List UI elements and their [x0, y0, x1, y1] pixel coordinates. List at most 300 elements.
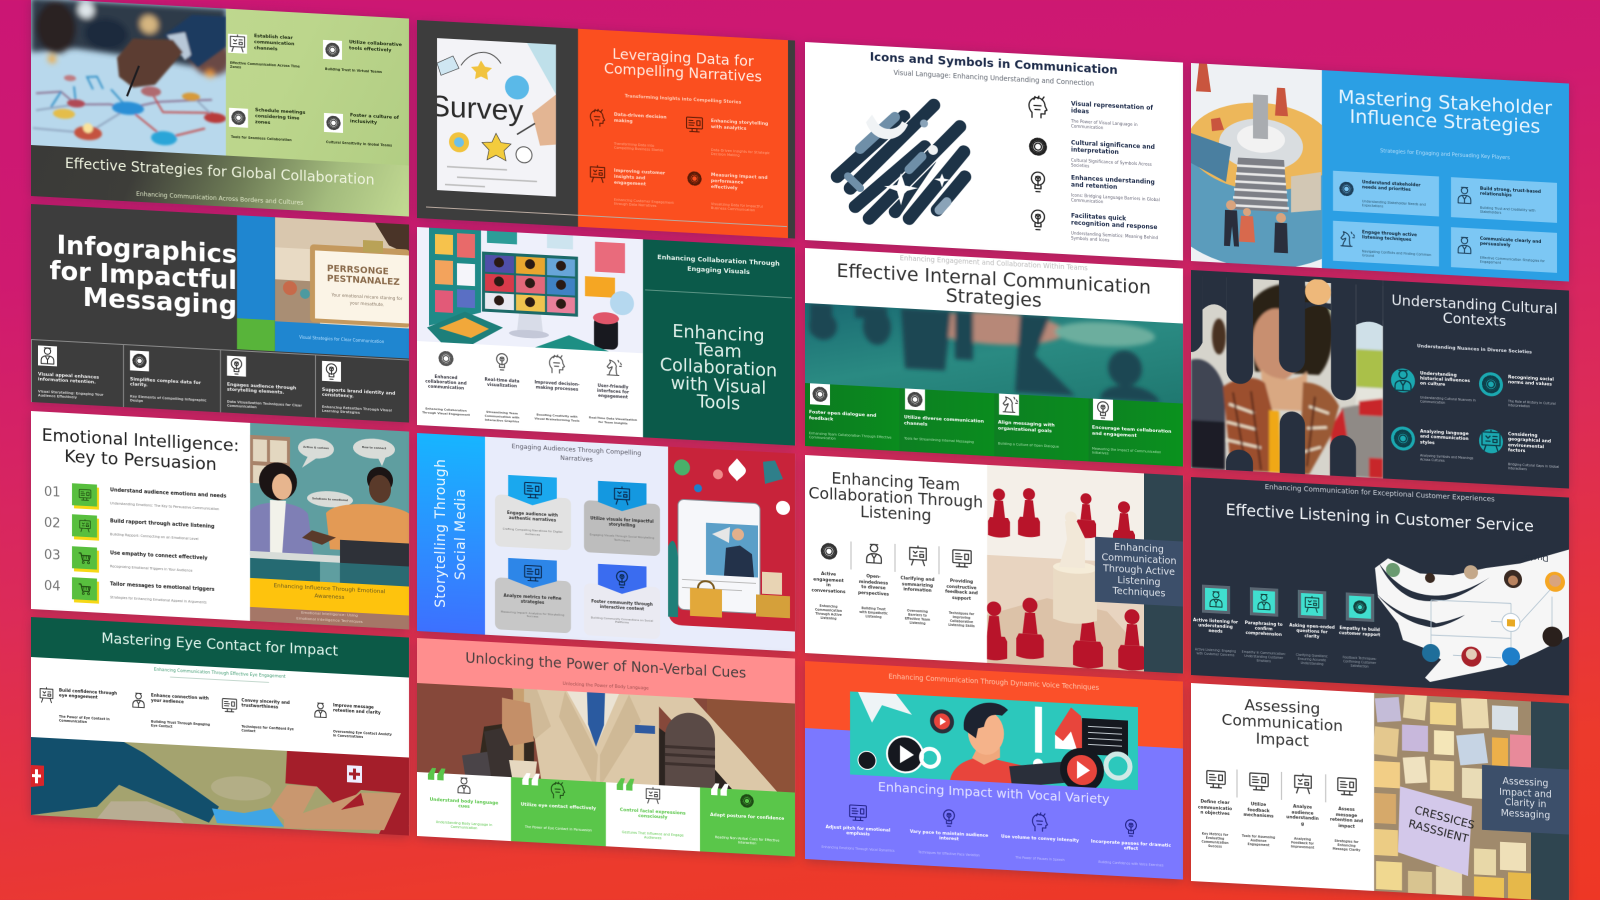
divider: [426, 206, 787, 227]
card: Understanding Stakeholder Needs and Expectations: [1362, 199, 1426, 209]
slide: Emotional Intelligence: [31, 410, 408, 629]
cell: [512, 777, 606, 846]
divider: [645, 289, 792, 298]
item: mechanisms: [1244, 813, 1274, 820]
item: [1281, 772, 1324, 866]
item: Facilitates quick recognition and response: [1071, 212, 1157, 231]
cell: Simplifies complex data for clarity.: [130, 377, 200, 389]
cell: Data Visualization Techniques for Clear Communication: [227, 400, 302, 409]
item: Understanding Semiotics: Meaning Behind Symbols and Icons: [1071, 230, 1158, 243]
card: [584, 480, 660, 556]
right strip: [1144, 473, 1183, 674]
item: constructive: [946, 584, 976, 591]
row: 01: [44, 484, 60, 500]
item: [1030, 209, 1158, 243]
item: Listening Skills: [948, 623, 974, 629]
item: Visualizing Data for Impactful Business Communication: [711, 202, 763, 213]
item: [588, 359, 638, 425]
title: Influence Strategies: [1350, 105, 1541, 137]
item: [324, 112, 399, 147]
item: Improving: [952, 615, 970, 620]
yellow band: [250, 577, 409, 615]
title: Effective Strategies for Global Collaboration: [65, 155, 374, 188]
item: [590, 108, 667, 153]
item: Feedback for: [1291, 841, 1314, 846]
vertical title: [431, 433, 471, 633]
item: channels: [254, 46, 277, 53]
card: [584, 564, 660, 638]
title: Strategies: [945, 285, 1041, 311]
item: Schedule meetings: [255, 108, 305, 116]
slide: Enhancing Team Collaboration Through Listening: [805, 455, 1182, 674]
photo: sign on table: PERRSONGE: [327, 264, 388, 278]
title: for Impactful: [49, 256, 237, 296]
item: Listening: [820, 616, 836, 621]
slide: Effective Internal Communication: [805, 248, 1182, 467]
item: Define clear: [1201, 800, 1230, 806]
row: Strategies for Enhancing Emotional Appeal in Arguments: [110, 594, 206, 604]
item: Enhancing Customer Engagement through Data Narratives: [614, 198, 674, 208]
photo: sticky note wall: CRESSICES: [1413, 803, 1476, 832]
item: [1237, 769, 1280, 864]
item: Strategies for: [1335, 839, 1359, 844]
item: Data-driven decision making: [614, 113, 667, 125]
item: Communication: [815, 608, 842, 613]
item: [422, 351, 470, 417]
item: to diverse: [861, 585, 885, 592]
row: Build rapport through active listening: [110, 518, 214, 529]
item: The Power of Eye Contact in Communication: [59, 715, 109, 724]
item: [852, 542, 895, 636]
cell: [904, 388, 984, 444]
cell: Reading Non-Verbal Cues for Effective Interaction: [715, 835, 780, 846]
cell: Enhancing Team Collaboration Through Effective Communication: [809, 431, 891, 441]
item: in: [826, 583, 830, 589]
diagonal bar graphic: [830, 98, 972, 226]
cell: [998, 394, 1059, 449]
title: Listening: [860, 502, 931, 524]
title: Messaging: [82, 284, 237, 322]
subtitle: Enhancing Engagement and Collaboration Within Teams: [899, 254, 1087, 272]
callout: Messaging: [1501, 808, 1550, 822]
photo: sign on table: Your emotional micare staning for: [330, 293, 402, 301]
row: Building Rapport: Connecting on an Emotional Level: [110, 532, 198, 541]
item: Convey sincerity and trustworthiness: [241, 697, 289, 709]
title: Key to Persuasion: [64, 446, 216, 474]
title: [1392, 292, 1558, 330]
cell: “: [519, 766, 544, 811]
subtitle: Unlocking the Power of Body Language: [563, 681, 649, 691]
cell: “: [707, 776, 732, 821]
card: Measuring Impact: Analytics for Storytelling Success: [501, 609, 564, 618]
subtitle: Enhancing Communication Through Dynamic Voice Techniques: [888, 673, 1099, 692]
item: considering time: [255, 114, 299, 121]
item: Enhancing: [819, 604, 837, 609]
cell: “: [424, 760, 449, 806]
item: Empathy to build customer rapport: [1339, 625, 1381, 637]
slide: Leveraging Data: [417, 20, 795, 239]
photo: sign on table: PESTNANALEZ: [327, 274, 400, 288]
callout: Clarity in: [1505, 797, 1547, 811]
item: message: [1336, 812, 1358, 819]
slide: Mastering Eye Contact: [31, 617, 408, 836]
item: [686, 116, 770, 158]
item: Foster a culture of: [350, 113, 398, 121]
item: [1478, 429, 1559, 471]
heading: Engaging Audiences Through Compelling: [512, 443, 642, 457]
title: Effective Internal Communication: [836, 260, 1150, 298]
photo: medics: [31, 737, 409, 836]
cell: Utilize eye contact effectively: [521, 803, 596, 812]
item: Improvement: [1291, 845, 1314, 850]
subtitle: Transforming Insights into Compelling Stories: [625, 94, 742, 105]
item: Bridging Cultural Gaps in Global Interactions: [1508, 462, 1559, 471]
green header: [31, 617, 409, 678]
card: Build strong, trust-based relationships: [1480, 187, 1541, 199]
item: conversations: [811, 588, 845, 595]
cell: Building a Culture of Open Dialogue: [998, 441, 1059, 449]
title: [1191, 694, 1374, 753]
item: [1193, 584, 1239, 673]
slide: Storytelling Through Social Media: [417, 432, 795, 651]
item: [1337, 592, 1383, 680]
item: Enhancing Collaboration Through Visual Engagement: [422, 406, 470, 417]
item: g: [1301, 822, 1304, 827]
row: 04: [44, 578, 60, 594]
row: Understand audience emotions and needs: [110, 487, 226, 499]
item: Evaluating: [1206, 836, 1225, 841]
item: Collaborative: [949, 619, 973, 624]
slide: Icons and Symbols: [805, 42, 1182, 261]
dividers: [1236, 769, 1328, 802]
panel title: Enhancing: [673, 322, 765, 347]
cell: The Power of Eye Contact in Persuasion: [525, 825, 592, 833]
item: Use volume to convey intensity: [1001, 835, 1078, 844]
item: Audience: [1251, 838, 1267, 843]
title: Compelling Narratives: [604, 61, 762, 85]
item: Utilize: [1251, 802, 1266, 808]
brown footer: [250, 606, 409, 629]
item: [130, 691, 218, 738]
item: Enhanced collaboration and communication: [426, 374, 467, 391]
pink header: [417, 638, 795, 704]
item: audience: [1292, 810, 1314, 816]
cell: Visual Storytelling: Engaging Your Audience Effectively: [38, 389, 103, 400]
item: Establish clear: [254, 34, 292, 41]
illustration: presenter with camera: [850, 691, 1138, 790]
item: [996, 809, 1084, 872]
callout: Through Active: [1103, 563, 1174, 578]
item: [1087, 814, 1175, 877]
item: Streamlining Team Communication with Interactive Graphics: [485, 410, 520, 423]
card: Understand stakeholder needs and priorities: [1362, 180, 1421, 193]
title: [1338, 86, 1552, 137]
item: [807, 539, 850, 633]
item: [484, 353, 520, 423]
item: Paraphrasing to confirm comprehension: [1245, 620, 1283, 637]
item: zones: [255, 120, 270, 126]
subtitle: Strategies for Engaging and Persuading Key Players: [1380, 148, 1510, 161]
card: Effective Communication Strategies for Engagement: [1480, 255, 1545, 264]
panel title: Tools: [697, 392, 740, 414]
card: Building Trust and Credibility with Stakeholders: [1480, 206, 1536, 215]
cell: [315, 354, 409, 424]
item: [228, 108, 306, 142]
item: Success: [1208, 844, 1222, 849]
item: Incorporate pauses for dramatic effect: [1091, 840, 1171, 852]
item: Analyze: [1293, 805, 1312, 811]
item: Icons: Bridging Language Barriers in Global Communication: [1071, 192, 1159, 204]
item: Message Clarity: [1333, 847, 1361, 852]
photo: circular platform: [1191, 63, 1322, 268]
item: Clarifying and: [900, 576, 934, 583]
item: Engagement: [1248, 842, 1270, 847]
card: [1451, 227, 1557, 272]
cell: Gestures That Influence and Engage Audiences: [622, 830, 684, 841]
panel heading: Enhancing Collaboration Through: [658, 253, 780, 268]
slide: Understanding Cultural Contexts: [1191, 270, 1569, 489]
item: Active listening for understanding needs: [1193, 617, 1238, 634]
item: Tools for Seamless Collaboration: [231, 135, 291, 142]
title: [41, 425, 239, 474]
item: [940, 546, 983, 641]
cell: [809, 383, 892, 441]
panel title: with Visual: [671, 373, 767, 399]
vertical title: Storytelling Through: [433, 458, 449, 608]
item: Asking open-ended questions for clarity: [1290, 622, 1335, 639]
item: [814, 799, 902, 862]
item: insights and: [614, 175, 646, 182]
title: Infographics: [56, 231, 237, 270]
item: [1478, 372, 1556, 408]
item: communication: [254, 40, 294, 47]
item: Data-Driven Insights for Strategic Decision Making: [711, 148, 770, 158]
subtitle: Enhancing Communication Across Borders and Cultures: [136, 190, 303, 206]
item: Key Metrics for: [1202, 832, 1229, 837]
slide: Infographics for Impactful Messaging: [31, 204, 408, 423]
item: inclusivity: [350, 119, 377, 126]
card: Navigating Conflicts and Finding Common Ground: [1362, 249, 1431, 258]
photo: hand over network map: [31, 0, 226, 156]
cell: [1092, 398, 1172, 456]
footer text: [250, 606, 409, 627]
photo with pill mask: [1191, 278, 1384, 478]
item: [38, 686, 126, 733]
item: Analyzing Symbols and Meanings Across Cultures: [1420, 453, 1474, 463]
callout: Listening: [1117, 575, 1160, 588]
item: with Empathetic: [859, 610, 887, 616]
item: Through Active: [815, 612, 841, 617]
subtitle: Visual Language: Enhancing Understanding and Connection: [893, 69, 1094, 88]
item: Techniques for Effective Pace Variation: [918, 850, 979, 857]
item: understandin: [1287, 815, 1319, 822]
blue caption band: [275, 322, 408, 359]
item: [590, 164, 674, 208]
item: Visual representation of ideas: [1071, 100, 1153, 116]
row: [44, 512, 244, 549]
title bar: [31, 145, 408, 216]
heading: Narratives: [560, 454, 593, 463]
item: The Power of Visual Language in Communication: [1071, 118, 1137, 130]
item: Improved decision-making processes: [535, 379, 580, 392]
title: Contexts: [1443, 310, 1507, 330]
cell: Supports brand identity and consistency.: [322, 388, 395, 400]
item: Open-: [866, 574, 880, 580]
item: engagement: [813, 577, 843, 584]
item: Analyzing language and communication styles: [1420, 429, 1469, 446]
card: [1451, 177, 1557, 223]
item: Improving customer: [614, 169, 665, 176]
illustration: two people talking: Solutions to emotional: [312, 496, 347, 502]
subtitle: Understanding Nuances in Diverse Societies: [1417, 344, 1532, 356]
photo: suited figure with microphone: [417, 683, 795, 793]
item: [220, 696, 308, 743]
item: mindedness: [858, 580, 888, 586]
item: Real-Time Data Visualization for Team Insights: [589, 415, 637, 425]
card: Foster community through interactive content: [592, 598, 653, 611]
item: Considering geographical and environmental factors: [1508, 432, 1551, 454]
item: Cultural significance and interpretation: [1071, 139, 1155, 156]
band text: Enhancing Influence Through Emotional: [273, 583, 385, 595]
item: perspectives: [858, 591, 889, 597]
item: Enhancing Emotions Through Vocal Dynamics: [821, 845, 894, 853]
item: support: [952, 596, 971, 602]
item: Vary pace to maintain audience interest: [909, 830, 988, 843]
photo: silhouettes: [805, 303, 1183, 404]
item: Listening: [865, 614, 881, 619]
item: Feedback Techniques: Confirming Customer Satisfaction: [1343, 655, 1377, 668]
item: Active: [821, 572, 836, 578]
item: Assess: [1339, 807, 1355, 813]
title: Understanding Cultural: [1392, 292, 1558, 317]
callout: Techniques: [1112, 585, 1165, 599]
item: Building Trust Through Engaging Eye Contact: [151, 720, 210, 729]
slide: Effective Listening in Customer Service: [1191, 477, 1569, 696]
callout: Communication: [1101, 552, 1176, 567]
illustration: two people talking: Active & curious: [303, 444, 329, 450]
item: Listening: [909, 621, 925, 626]
image: social media: [668, 446, 795, 631]
callout: Enhancing: [1114, 542, 1164, 556]
title: Mastering Eye Contact for Impact: [101, 631, 338, 660]
underline: [170, 677, 269, 683]
item: [1241, 587, 1287, 675]
item: [1028, 138, 1155, 169]
row: [44, 544, 244, 581]
footer text: Emotional Intelligence: Using: [301, 609, 358, 617]
item: Cultural Sensitivity in Global Teams: [326, 140, 392, 147]
item: [896, 544, 939, 638]
cell: “: [613, 771, 638, 816]
cell: [31, 339, 123, 408]
item: [1325, 774, 1368, 869]
panel title: [660, 322, 777, 414]
item: [905, 804, 993, 867]
row: [44, 481, 244, 518]
footer text: Emotional Intelligence Techniques: [296, 615, 362, 624]
item: Measuring impact and: [711, 173, 768, 181]
title: Icons and Symbols in Communication: [869, 50, 1117, 77]
item: n objectives: [1201, 811, 1230, 817]
title: Unlocking the Power of Non-Verbal Cues: [466, 651, 747, 682]
slide: Assessing Communication Impact: [1191, 683, 1569, 900]
item: [322, 39, 402, 74]
item: Effective Team: [904, 617, 930, 622]
item: [1289, 589, 1335, 678]
card: Utilize visuals for impactful storytelling: [591, 515, 654, 527]
title: Assessing: [1245, 696, 1321, 718]
title: Communication: [1222, 711, 1343, 736]
cell: Understand body language cues: [430, 798, 499, 810]
card: Communicate clearly and persuasively: [1480, 236, 1542, 248]
cell: Control facial expressions consciously: [620, 808, 686, 821]
card: [495, 474, 571, 550]
band text: Awareness: [314, 593, 344, 601]
item: engagement: [614, 181, 646, 188]
panel heading: [658, 253, 780, 276]
item: Improve message retention and clarity: [333, 702, 380, 715]
item: The Role of History in Cultural Interpretation: [1508, 399, 1556, 408]
item: effectively: [711, 185, 738, 192]
slide: Unlocking the Power of Non-Verbal Cues: [417, 638, 795, 857]
item: Building Trust in Virtual Teams: [325, 66, 382, 73]
callout: Assessing: [1503, 776, 1549, 789]
band: [805, 383, 1183, 467]
card: Engage through active listening techniques: [1362, 230, 1417, 243]
item: Cultural Significance of Symbols Across Societies: [1071, 157, 1151, 169]
item: Active Listening: Engaging with Customer Concerns: [1195, 647, 1236, 657]
item: Building Confidence with Voice Exercises: [1098, 860, 1163, 867]
title: Enhancing Impact with Vocal Variety: [878, 779, 1109, 807]
cell: Encourage team collaboration and engagement: [1092, 426, 1171, 439]
item: [228, 34, 300, 69]
title: [49, 231, 237, 322]
title: Emotional Intelligence:: [41, 425, 239, 455]
row: Use empathy to connect effectively: [110, 549, 207, 561]
item: Techniques for Confident Eye Contact: [241, 724, 293, 733]
cell: Adapt posture for confidence: [710, 813, 785, 822]
cell: [220, 349, 315, 418]
item: Utilize collaborative: [349, 39, 402, 47]
network swoosh: Ductor: [1521, 552, 1549, 563]
item: impact: [1339, 824, 1355, 830]
item: Tools for Assessing: [1242, 834, 1275, 840]
cell: Align messaging with organizational goals: [998, 420, 1054, 434]
cell: [700, 787, 795, 857]
callout: [1482, 765, 1569, 835]
item: summarizing: [902, 582, 933, 589]
panel title: Collaboration: [660, 356, 777, 382]
cell: Visual appeal enhances information retention.: [38, 372, 99, 386]
title: Enhancing Team: [831, 468, 960, 494]
subtitle: Enhancing Communication for Exceptional Customer Experiences: [1265, 483, 1495, 504]
item: [1194, 767, 1237, 861]
item: Enhancing storytelling with analytics: [711, 119, 769, 132]
row: [44, 575, 244, 612]
illustration: two people talking: How to connect: [361, 444, 386, 450]
item: [312, 701, 400, 748]
network swoosh: [1371, 535, 1569, 696]
row: Tailor messages to emotional triggers: [110, 580, 214, 592]
title: Impact: [1256, 729, 1309, 750]
item: Clarifying Questions: Ensuring Accurate Understanding: [1296, 653, 1328, 666]
row: Recognizing Emotional Triggers in Your Audience: [110, 563, 192, 572]
caption: Visual Strategies for Clear Communication: [299, 335, 384, 344]
card: Engage audience with authentic narratives: [507, 509, 558, 522]
vertical title: Social Media: [453, 488, 469, 580]
item: Providing: [950, 579, 973, 585]
title: Mastering Stakeholder: [1338, 86, 1552, 120]
